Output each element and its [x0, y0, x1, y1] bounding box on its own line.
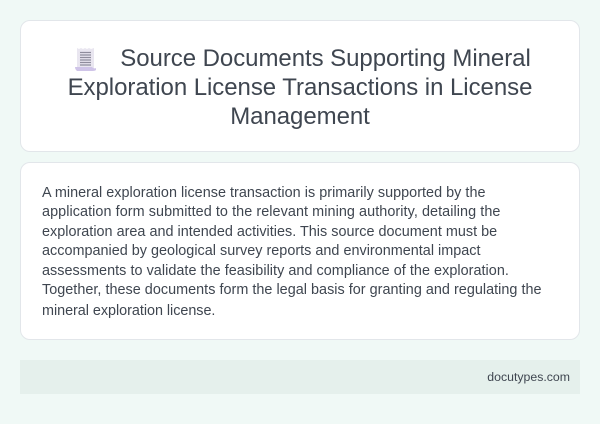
title: Management — [230, 103, 370, 130]
panel: title card — [20, 20, 580, 152]
footer source text: docutypes.com — [487, 370, 570, 384]
footer bar — [20, 360, 580, 394]
description text: exploration area and intended activities. This source document must be — [42, 224, 497, 240]
panel: description card — [20, 162, 580, 340]
description text: mineral exploration license. — [42, 303, 215, 319]
description text: accompanied by geological survey reports and environmental impact — [42, 243, 481, 259]
description text: A mineral exploration license transaction is primarily supported by the — [42, 185, 486, 201]
description text: application form submitted to the relevant mining authority, detailing the — [42, 204, 500, 220]
description text: Together, these documents form the legal basis for granting and regulating the — [42, 282, 542, 298]
title: Exploration License Transactions in License — [68, 74, 532, 101]
description text — [42, 185, 542, 319]
description text: assessments to validate the feasibility and compliance of the exploration. — [42, 263, 509, 279]
title — [68, 45, 532, 130]
title: Source Documents Supporting Mineral — [120, 45, 531, 72]
icon: document scroll — [75, 48, 96, 71]
